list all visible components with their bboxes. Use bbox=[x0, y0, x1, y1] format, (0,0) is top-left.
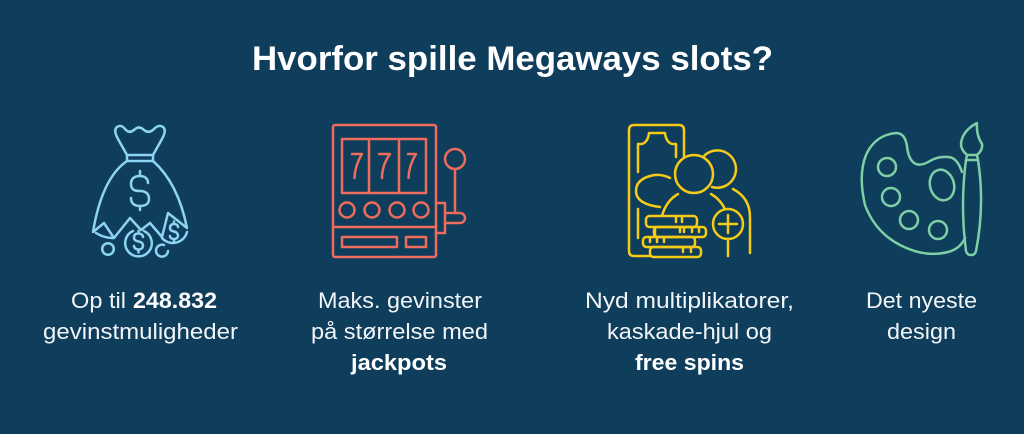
label: jackpots: på størrelse med bbox=[311, 319, 488, 344]
title: Hvorfor spille Megaways slots? bbox=[252, 40, 773, 78]
label: multiplikatorer: kaskade-hjul og bbox=[607, 319, 772, 344]
icon: bill and coins bbox=[629, 125, 750, 257]
label: gevinstmuligheder: Op til bbox=[71, 288, 126, 313]
icon: money bag bbox=[93, 126, 187, 257]
label: gevinstmuligheder bbox=[43, 288, 238, 344]
label: jackpots: Maks. gevinster bbox=[318, 288, 482, 313]
label: design bbox=[866, 288, 977, 344]
label: gevinstmuligheder: 248.832 bbox=[133, 288, 217, 313]
label: multiplikatorer bbox=[585, 288, 794, 375]
label: design: design bbox=[887, 319, 956, 344]
label: jackpots: jackpots bbox=[350, 350, 447, 375]
icon: palette and brush bbox=[862, 123, 982, 255]
label: gevinstmuligheder: gevinstmuligheder bbox=[43, 319, 238, 344]
icon: slot machine bbox=[333, 125, 465, 257]
label: design: Det nyeste bbox=[866, 288, 977, 313]
label: multiplikatorer: Nyd multiplikatorer, bbox=[585, 288, 794, 313]
label: jackpots bbox=[311, 288, 488, 375]
label: multiplikatorer: free spins bbox=[635, 350, 744, 375]
